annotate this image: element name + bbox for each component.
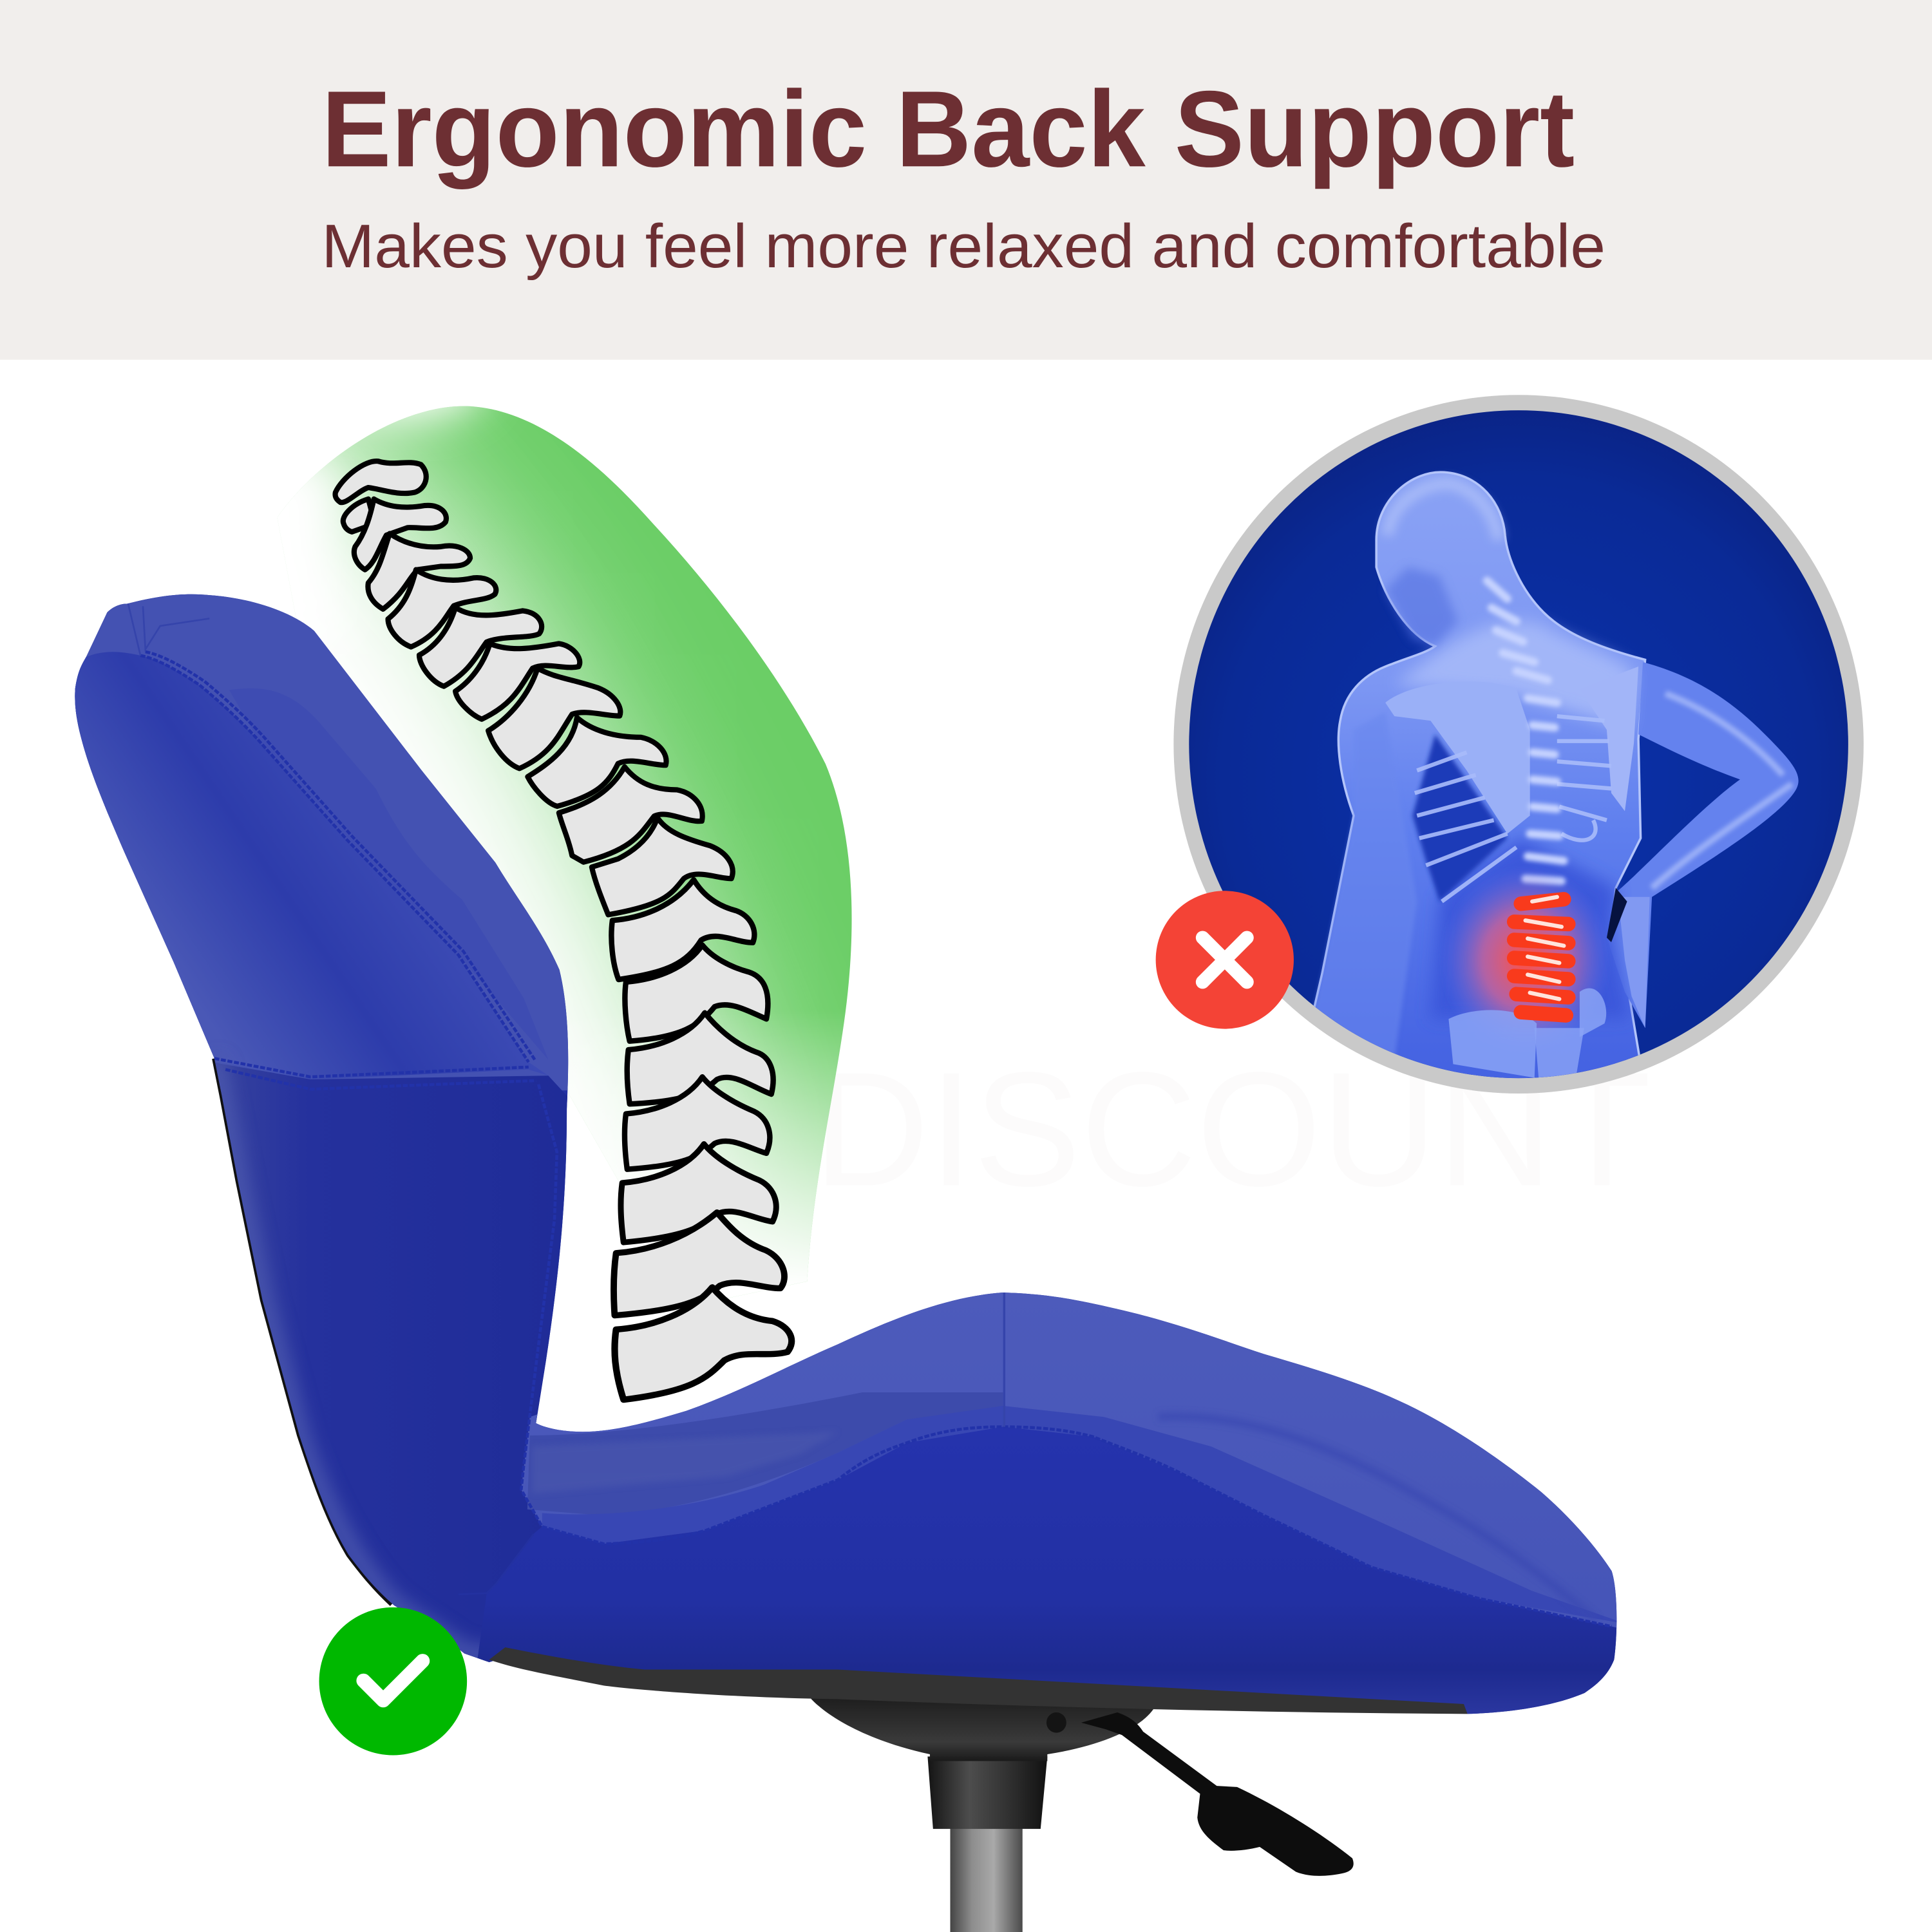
green support glow behind spine xyxy=(277,406,852,1298)
seat top surface xyxy=(521,1282,1639,1633)
lower panel of backrest xyxy=(197,1059,579,1676)
pelvis xyxy=(1448,988,1606,1077)
hand shadow xyxy=(1607,888,1627,942)
header band xyxy=(0,0,1932,360)
right scapula xyxy=(1580,667,1638,811)
chair base: gas lift, hub and lever xyxy=(810,1698,1354,1932)
black shell under seat xyxy=(489,1647,1468,1714)
front panel of backrest xyxy=(62,652,548,1079)
arm on hip xyxy=(1607,662,1799,1028)
torso and head xyxy=(1295,472,1645,1091)
pain glow xyxy=(1439,866,1611,1055)
lit left edge of lower back xyxy=(214,1058,641,1673)
face shade xyxy=(1385,567,1457,646)
circular photo: back pain xyxy=(1156,395,1864,1094)
blue backdrop xyxy=(1189,410,1848,1078)
chair base colour xyxy=(50,579,1651,1725)
seat pan light stripe xyxy=(533,1432,838,1493)
green check badge xyxy=(319,1607,467,1755)
collar xyxy=(927,1756,1047,1829)
title: Ergonomic Back Support xyxy=(321,68,1575,189)
upper vertebrae xyxy=(336,461,733,914)
skull highlight xyxy=(1388,484,1499,540)
forearm highlight xyxy=(1652,694,1792,888)
seat contour creases xyxy=(1158,1417,1596,1620)
human body figure xyxy=(1295,472,1799,1091)
seat front face xyxy=(468,1427,1639,1725)
sacrum xyxy=(1535,1028,1584,1082)
ribs xyxy=(1415,716,1611,902)
shaded seat pan near backrest xyxy=(527,1392,1003,1515)
seat front ridge band xyxy=(542,1406,1627,1624)
lower back shade xyxy=(1430,838,1629,1019)
lever xyxy=(1081,1712,1354,1876)
stitching xyxy=(140,652,1612,1627)
spine column xyxy=(1487,581,1564,881)
subtitle: Makes you feel more relaxed and comfortable xyxy=(321,212,1605,281)
side fold of backrest xyxy=(229,688,548,1059)
chair xyxy=(50,579,1651,1932)
circle frame xyxy=(1173,395,1864,1094)
rib cavity shade xyxy=(1412,734,1508,902)
top cap seam xyxy=(128,604,209,656)
spine illustration xyxy=(336,461,791,1399)
red lumbar vertebrae xyxy=(1514,897,1568,1016)
scapula xyxy=(1385,681,1530,834)
pole xyxy=(950,1826,1023,1932)
upper back highlight xyxy=(1394,621,1634,730)
corner crease xyxy=(459,1534,533,1595)
red cross badge xyxy=(1156,891,1294,1029)
upholstered body xyxy=(50,579,1651,1725)
left arm shade xyxy=(1295,712,1417,1091)
side panel and top cap of backrest xyxy=(50,579,591,1090)
hub xyxy=(810,1698,1153,1761)
black shell edge behind back xyxy=(214,1058,392,1604)
hub bolt xyxy=(1046,1712,1066,1733)
hand xyxy=(1618,897,1650,1028)
watermark: DISCOUNT xyxy=(813,1038,1651,1220)
seat centre seam xyxy=(1003,1291,1005,1427)
lower vertebrae xyxy=(611,880,754,980)
